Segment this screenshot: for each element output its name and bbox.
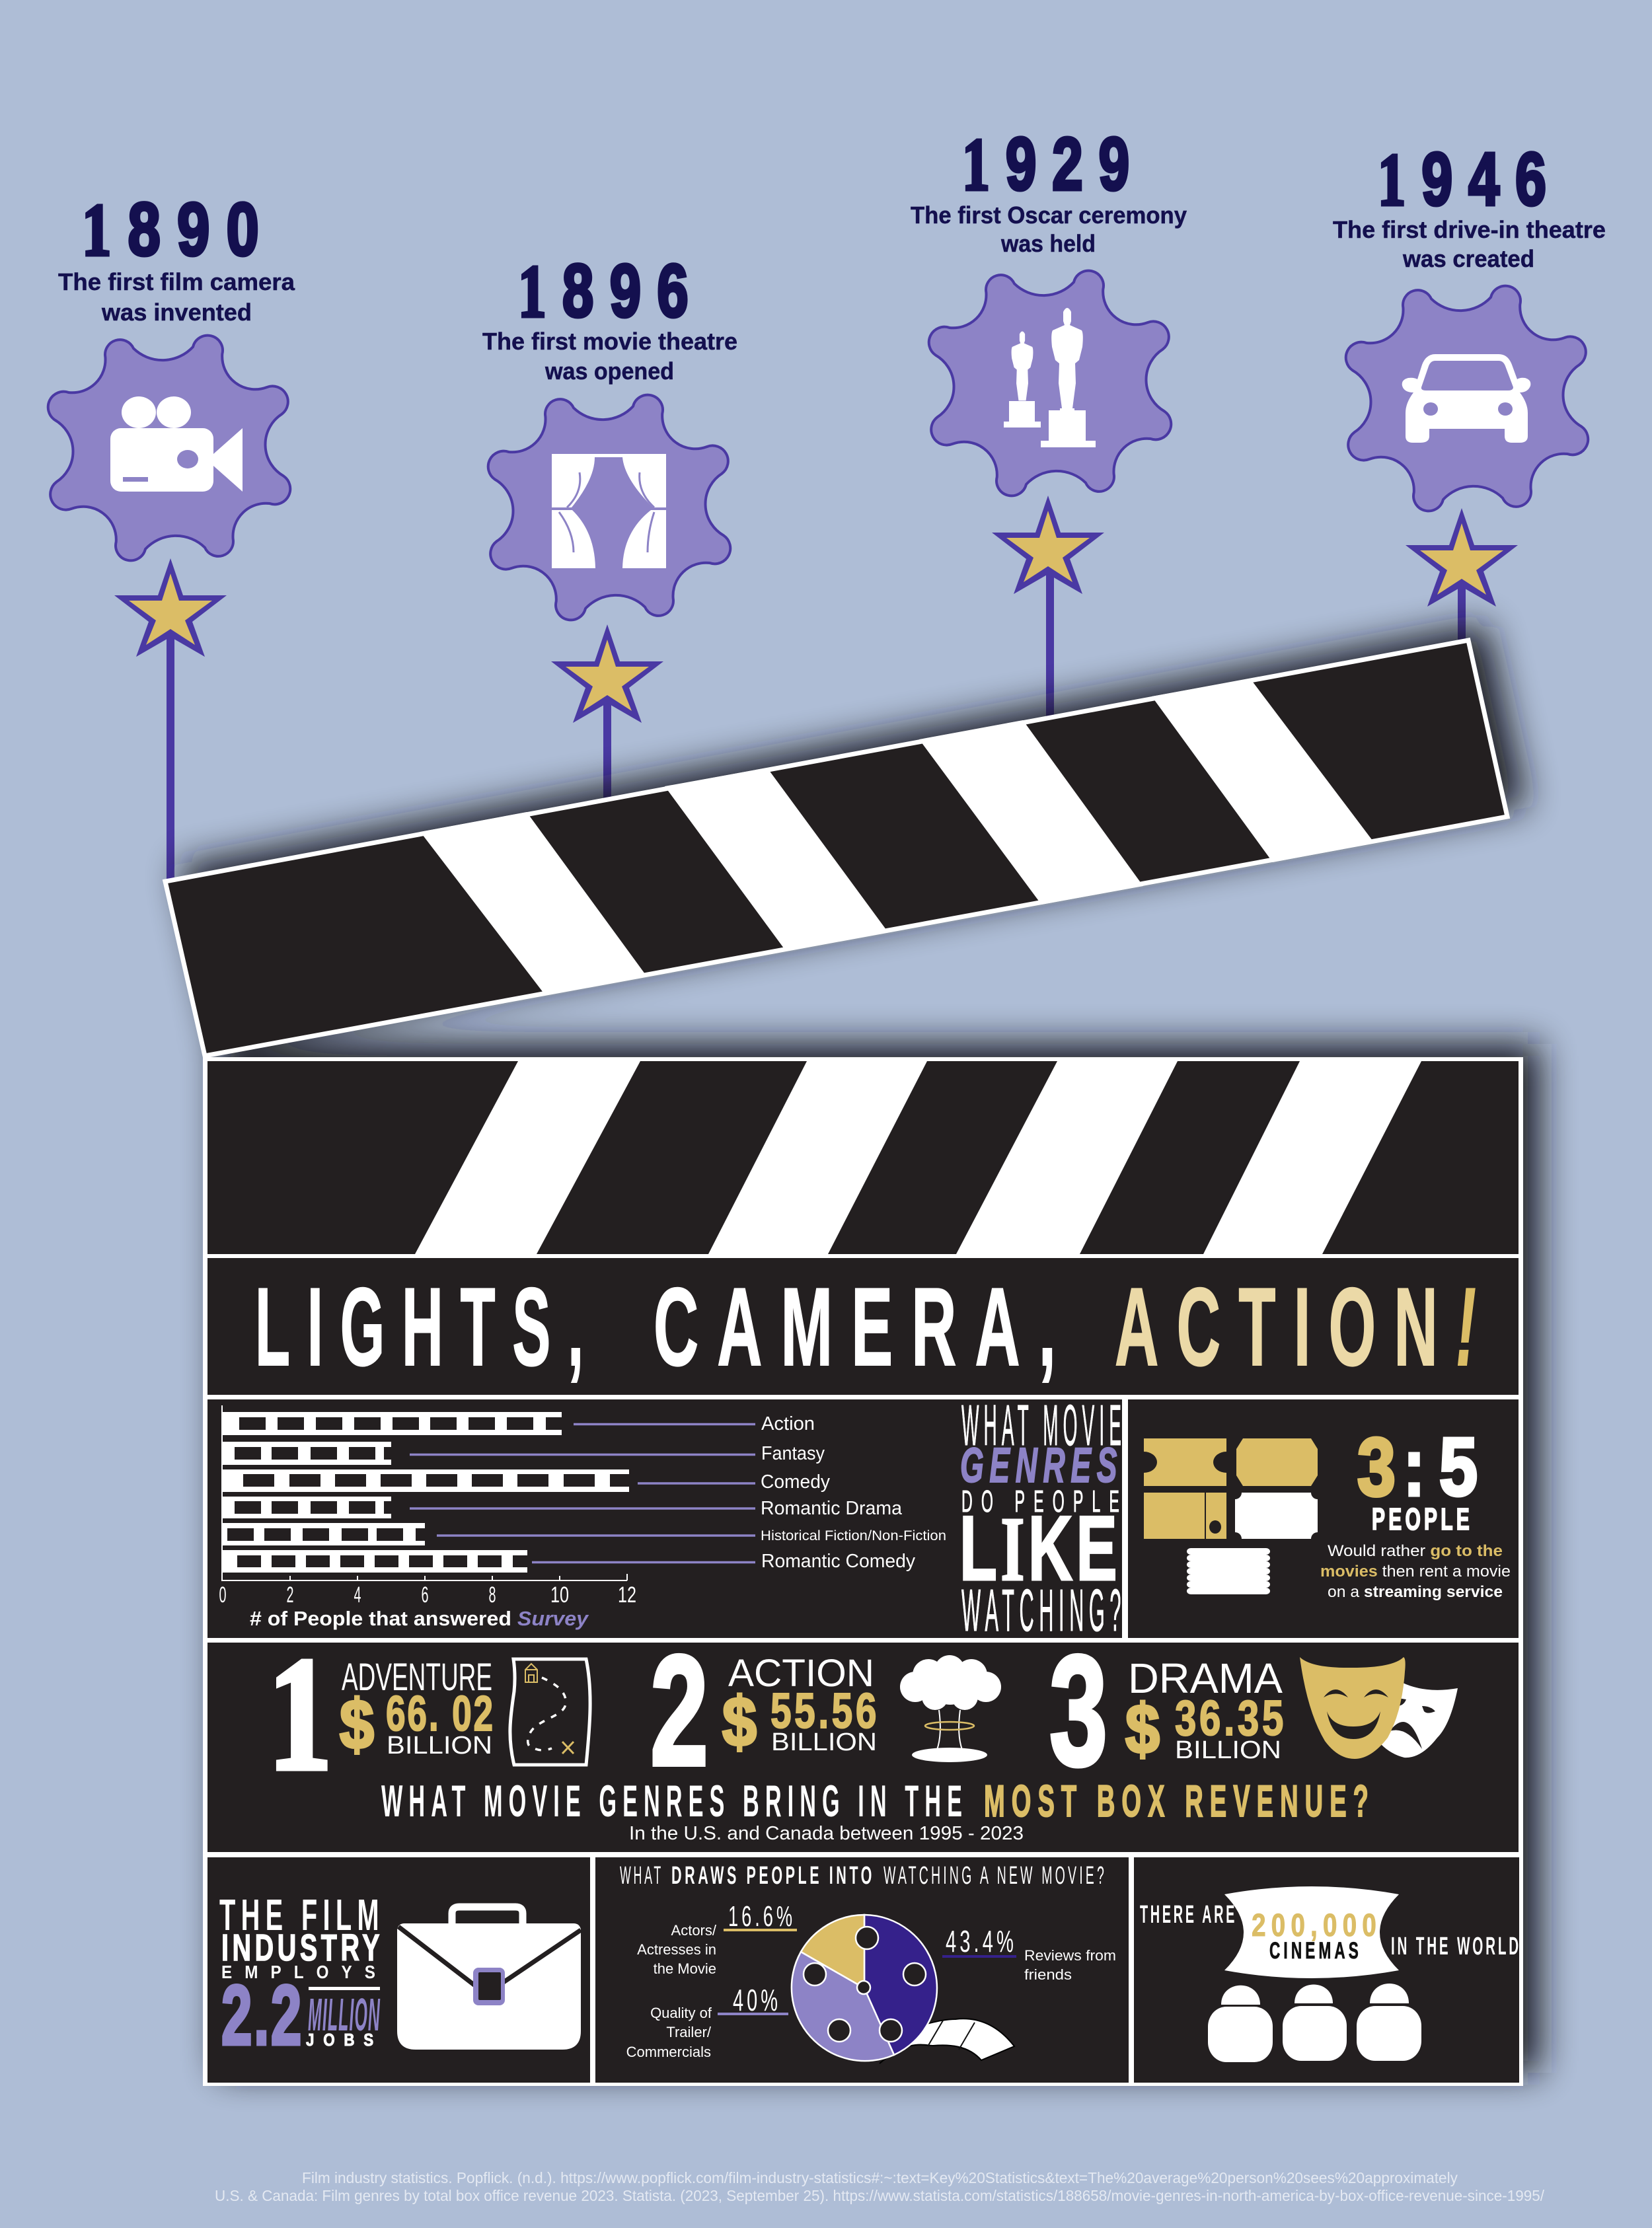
rank 2 action: 2 [650, 1623, 708, 1799]
callout: reviews 43.4%: 43.4% [946, 1924, 1017, 1958]
timeline stems [167, 568, 1466, 882]
star 1890 [114, 558, 227, 657]
caption 1929: The first Oscar ceremony [911, 202, 1187, 229]
icon: car [1402, 354, 1530, 443]
stat description: movies then rent a movie [1320, 1563, 1511, 1580]
icon: theatre masks [1300, 1657, 1458, 1759]
stat: 200,000: 200,000 [1252, 1908, 1382, 1943]
timeline event 1946 [1333, 137, 1606, 607]
rank 2 action: ACTION [728, 1652, 874, 1695]
icon: film camera [110, 396, 243, 492]
category labels: Action [761, 1413, 815, 1434]
gear badge 1890 [46, 334, 292, 562]
rank 2 action: 55.56 [770, 1683, 880, 1738]
icon: treasure map [510, 1659, 590, 1765]
title text: CAMERA, [654, 1265, 1074, 1389]
category labels [761, 1413, 946, 1572]
footer references: Film industry statistics. Popflick. (n.d.). https://www.popflick.com/film-industry-statistics#:~:text=Key%20Statistics&text=The%20average%20person%20sees%20approximately [302, 2169, 1458, 2186]
text: in the world: IN THE WORLD [1391, 1933, 1521, 1960]
timeline event 1929 [911, 122, 1187, 594]
jobs text: EMPLOYS [221, 1962, 388, 1982]
stat description [1320, 1542, 1511, 1601]
callout: actors 16.6% [637, 1900, 797, 1977]
stat label: cinemas: CINEMAS [1269, 1938, 1362, 1964]
timeline event 1896 [482, 249, 737, 723]
panel: film industry jobs [207, 1857, 590, 2083]
jobs text: INDUSTRY [221, 1927, 383, 1969]
caption 1946: The first drive-in theatre [1333, 216, 1606, 243]
rank 3 drama: 3 [1049, 1623, 1108, 1799]
axis numbers [219, 1582, 636, 1608]
icon: oscar statues [1004, 308, 1096, 447]
callout: trailer 40%: Quality of [650, 2005, 712, 2021]
caption 1929 [911, 202, 1187, 257]
clapperboard body: WATCHING? [961, 1578, 1126, 1644]
text: there are: THERE ARE [1140, 1901, 1237, 1929]
axis numbers: 8 [489, 1582, 496, 1608]
jobs text: THE FILM [219, 1890, 385, 1940]
star 1929 [992, 496, 1104, 594]
bar: Comedy 12 [221, 1469, 630, 1492]
heading: what movie genres [959, 1393, 1128, 1644]
footer references: U.S. & Canada: Film genres by total box office revenue 2023. Statista. (2023, September 25). https://www.statista.com/statistics/188658/movie-genres-in-north-america-by-box-office-revenue-since-1995/ [215, 2187, 1545, 2204]
subheading: In the U.S. and Canada between 1995 - 2023 [629, 1823, 1024, 1844]
heading: what movie genres: LIKE [959, 1497, 1121, 1600]
panel: film industry jobs: MILLION [308, 1989, 381, 2040]
icon: explosion cloud [900, 1655, 1001, 1762]
category labels: Romantic Drama [761, 1498, 903, 1519]
heading: WHAT [620, 1862, 663, 1890]
bar: Action 10 [221, 1412, 562, 1435]
rank 3 drama [1049, 1623, 1458, 1799]
year 1946: 1946 [1378, 137, 1562, 221]
star 1896 [551, 624, 663, 723]
axis numbers: 0 [219, 1582, 226, 1608]
axis numbers: 10 [550, 1582, 569, 1608]
rank 3 drama: DRAMA [1128, 1654, 1283, 1702]
stat: 3:5: : [1404, 1422, 1425, 1513]
rank 1 adventure: ADVENTURE [342, 1656, 492, 1699]
stat: 3:5 [1357, 1422, 1478, 1513]
heading: most box revenue: WHAT MOVIE GENRES BRING IN THE [381, 1776, 968, 1826]
heading: what movie genres: DO PEOPLE [961, 1484, 1128, 1518]
gear badge 1946 [1344, 284, 1590, 513]
caption 1896 [482, 328, 737, 385]
stat: 3:5: 5 [1439, 1422, 1478, 1513]
clapperboard body [203, 1057, 1523, 2086]
panel: genres survey chart [207, 1393, 1128, 1644]
caption 1946 [1333, 216, 1606, 272]
callout: actors 16.6%: Actors/ [671, 1922, 717, 1939]
heading: what movie genres: GENRES [960, 1438, 1123, 1493]
stat: 3:5: 3 [1357, 1422, 1396, 1513]
bar chart: film strip bars [219, 1405, 946, 1630]
axis title: # of People that answered Survey [250, 1607, 589, 1630]
caption 1946: was created [1402, 245, 1534, 272]
icon: curtains [552, 454, 666, 568]
clapperboard body: WHAT MOVIE [961, 1393, 1126, 1458]
caption 1890: The first film camera [58, 268, 295, 295]
heading: DRAWS PEOPLE INTO [671, 1862, 875, 1890]
stat label: people: PEOPLE [1372, 1502, 1473, 1536]
callout: trailer 40%: 40% [733, 1983, 781, 2017]
callout: actors 16.6%: Actresses in [637, 1941, 716, 1958]
pie chart: film reel [792, 1915, 937, 2061]
caption 1890: was invented [101, 299, 252, 326]
rank 1 adventure: 1 [268, 1624, 332, 1804]
title text [255, 1265, 1494, 1389]
jobs text [219, 1890, 388, 2063]
bar: Romantic Comedy 9 [221, 1550, 528, 1573]
star 1946 [1406, 508, 1518, 607]
icon: cinema screen [1224, 1886, 1399, 1978]
jobs text: JOBS [306, 2030, 383, 2050]
icon: gold admission tickets [1144, 1438, 1318, 1539]
clapper arm [165, 640, 1507, 1056]
callout: trailer 40%: Trailer/ [666, 2024, 712, 2040]
stat description: Would rather go to the [1328, 1542, 1503, 1560]
rank 2 action [650, 1623, 1001, 1799]
rank 1 adventure: $ [340, 1686, 374, 1764]
year 1896: 1896 [518, 249, 704, 333]
axis [222, 1405, 627, 1580]
bar: Historical Fiction 6 [221, 1523, 426, 1545]
gear badge 1896 [486, 393, 732, 622]
rank 1 adventure: 66. 02 [386, 1686, 495, 1741]
heading: WATCHING A NEW MOVIE? [883, 1862, 1107, 1890]
category labels: Romantic Comedy [761, 1551, 915, 1572]
icon: briefcase [397, 1907, 581, 2050]
timeline event 1890 [46, 188, 295, 657]
caption 1890 [58, 268, 295, 326]
jobs text: 2.2 [221, 1968, 303, 2063]
icon: white admission tickets [1187, 1493, 1318, 1594]
panel: striped header [207, 1061, 1519, 1254]
title text: LIGHTS, [255, 1265, 601, 1389]
panel: cinemas in the world [1134, 1857, 1521, 2083]
leader lines [410, 1425, 755, 1562]
callout: reviews 43.4%: Reviews from [1024, 1947, 1116, 1964]
gear badge 1929 [927, 269, 1173, 498]
rank 1 adventure: BILLION [387, 1732, 492, 1760]
callout: reviews 43.4%: friends [1024, 1966, 1072, 1983]
axis numbers: 2 [287, 1582, 293, 1608]
panel: what draws people [595, 1857, 1129, 2083]
rank 3 drama: BILLION [1175, 1736, 1281, 1764]
footer references [215, 2169, 1545, 2204]
panel: box office revenue [207, 1623, 1519, 1852]
callout: reviews 43.4% [942, 1924, 1116, 1983]
caption 1896: was opened [544, 357, 674, 385]
drop shadows of clapperboard [180, 624, 1540, 2073]
year 1929: 1929 [962, 122, 1145, 206]
icon: film strip tail [880, 2019, 1014, 2063]
rank 1 adventure [268, 1624, 590, 1804]
callout: trailer 40% [626, 1983, 788, 2060]
year 1890: 1890 [82, 188, 276, 272]
rank 3 drama: 36.35 [1175, 1690, 1287, 1746]
rank 2 action: $ [722, 1683, 757, 1761]
bar: Romantic Drama 5 [221, 1497, 392, 1518]
panel: title [207, 1258, 1519, 1395]
callout: actors 16.6%: the Movie [654, 1960, 716, 1977]
category labels: Historical Fiction/Non-Fiction [761, 1528, 946, 1543]
category labels: Fantasy [761, 1443, 825, 1464]
category labels: Comedy [761, 1471, 830, 1493]
caption 1896: The first movie theatre [482, 328, 737, 355]
icon: cinema seats [1208, 1984, 1421, 2062]
rank 3 drama: $ [1125, 1690, 1160, 1768]
axis numbers: 6 [422, 1582, 428, 1608]
axis numbers: 12 [618, 1582, 636, 1608]
stat description: on a streaming service [1328, 1583, 1503, 1601]
callout: actors 16.6%: 16.6% [728, 1900, 796, 1933]
rank 2 action: BILLION [771, 1728, 877, 1756]
panel: 3 of 5 people [1128, 1399, 1519, 1638]
caption 1929: was held [1000, 230, 1096, 257]
bar: Fantasy 5 [221, 1442, 392, 1465]
axis numbers: 4 [354, 1582, 361, 1608]
callout: trailer 40%: Commercials [626, 2044, 711, 2060]
